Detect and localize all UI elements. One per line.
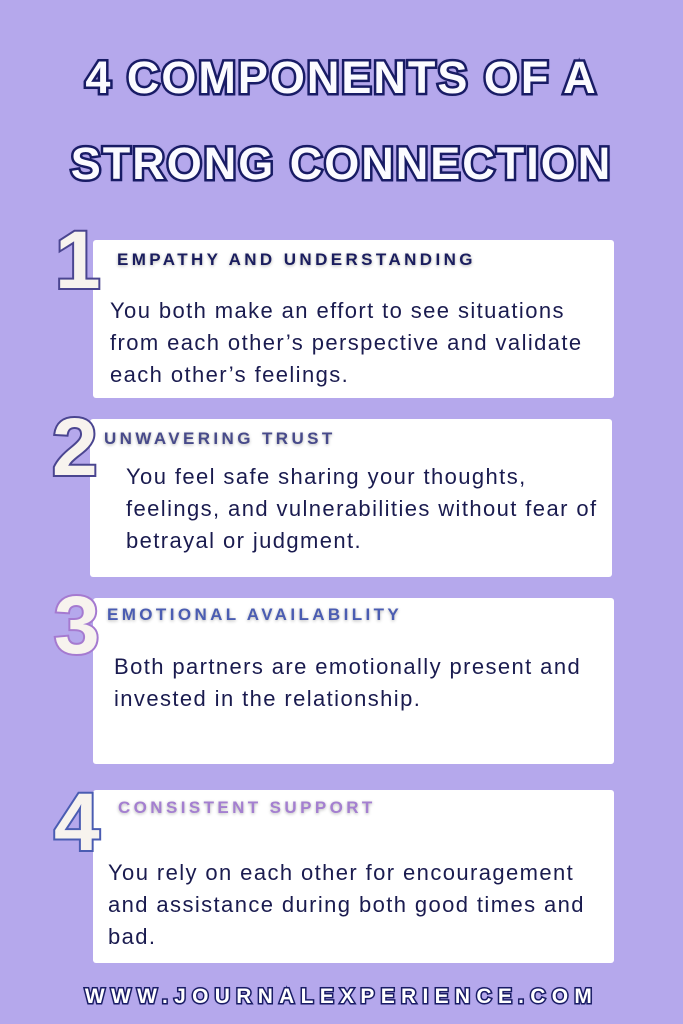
panel: emotional availability: [93, 598, 614, 764]
text: Both partners are emotionally present and: [114, 654, 581, 679]
text: [114, 654, 581, 711]
text: You rely on each other for encouragement: [108, 860, 574, 885]
title line 1: 4 COMPONENTS OF A: [85, 52, 598, 103]
title line 2: STRONG CONNECTION: [71, 138, 612, 189]
text: betrayal or judgment.: [126, 528, 362, 553]
text: feelings, and vulnerabilities without fear of: [126, 496, 597, 521]
icon: number 4: 4: [54, 777, 100, 868]
text: invested in the relationship.: [114, 686, 421, 711]
text: from each other’s perspective and validate: [110, 330, 583, 355]
icon: number 2: 2: [52, 402, 98, 493]
text: You feel safe sharing your thoughts,: [126, 464, 527, 489]
heading: EMOTIONAL AVAILABILITY: [107, 605, 402, 624]
text: [108, 860, 585, 949]
heading: CONSISTENT SUPPORT: [118, 798, 376, 817]
text: and assistance during both good times and: [108, 892, 585, 917]
title: [69, 52, 612, 189]
panel: trust: [90, 419, 612, 577]
text: bad.: [108, 924, 156, 949]
heading: UNWAVERING TRUST: [104, 429, 336, 448]
text: [110, 298, 583, 387]
icon: number 3: 3: [54, 580, 100, 671]
footer url: WWW.JOURNALEXPERIENCE.COM: [85, 985, 598, 1008]
heading: EMPATHY AND UNDERSTANDING: [117, 250, 476, 269]
text: each other’s feelings.: [110, 362, 349, 387]
icon: number 1: 1: [55, 215, 101, 306]
panel: support: [93, 790, 614, 963]
panel: empathy: [93, 240, 614, 398]
text: You both make an effort to see situations: [110, 298, 565, 323]
text: [126, 464, 597, 553]
